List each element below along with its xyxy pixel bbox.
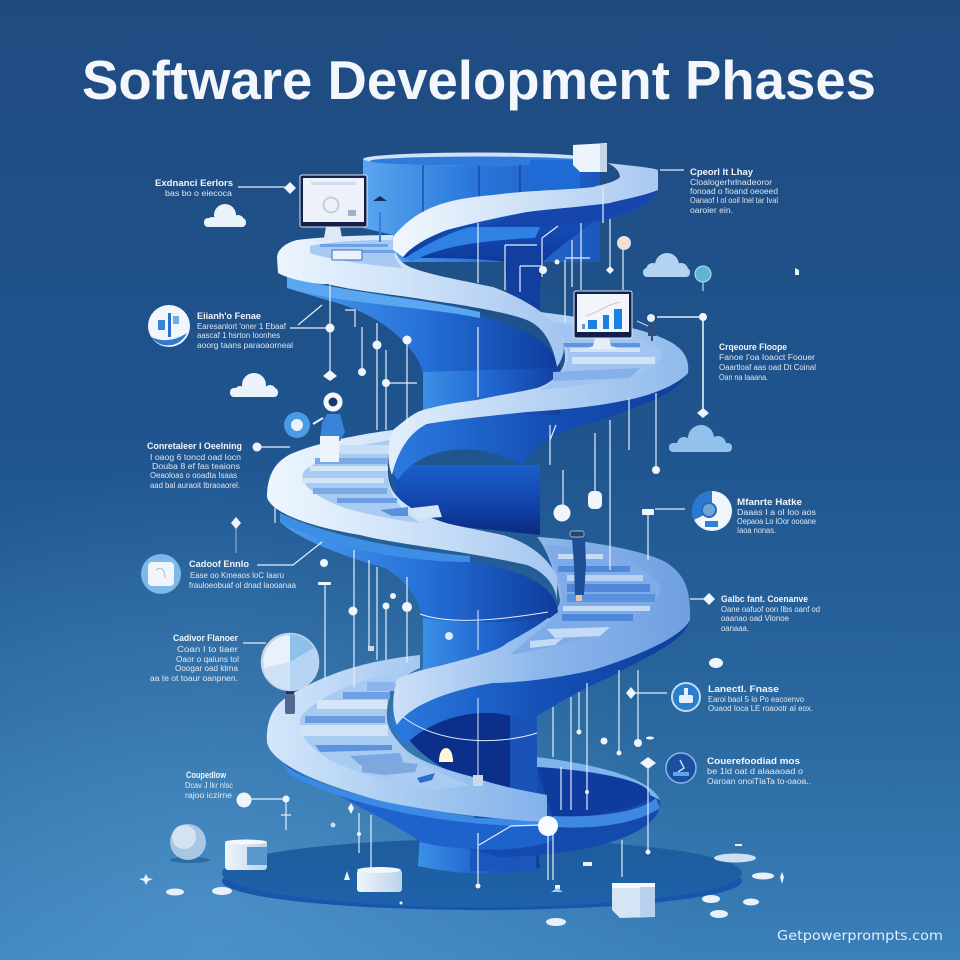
icon: phase circle 3 (692, 491, 732, 531)
label: circle 3 (737, 497, 817, 535)
cylinder block left (225, 840, 267, 870)
label: left middle: Douba 8 ef fas teaions (152, 462, 240, 471)
label: circle 2: Ease oo Kmeaos loC Iaaru (190, 571, 284, 580)
label: circle 4 (708, 684, 813, 713)
label: circle 2: frauloeobuaf ol dnad laooanaa (189, 581, 297, 590)
label: top right: oaroier ein. (690, 206, 733, 215)
cloud: top left (204, 204, 246, 227)
connector lines (238, 170, 708, 885)
cloud: middle left (230, 373, 278, 397)
bulb at top (618, 236, 630, 250)
label: circle 5: Oaroan onoiTlaTa to-oaoa.. (707, 777, 811, 786)
label: circle 4: Lanectl. Fnase (708, 684, 779, 694)
label: bottom left: Dcav J Ikr nlsc (185, 781, 233, 790)
label: top right: fonoad o fioand oeoeed (690, 187, 778, 196)
watermark: Getpowerprompts.com (777, 929, 943, 944)
cloud: top right (643, 253, 690, 277)
person with bubble (284, 395, 345, 462)
label: chart right: Crqeoure Floope (719, 342, 787, 352)
band 6 cavity and column (396, 690, 537, 800)
stairs 3 (510, 545, 660, 655)
label: bottom left: rajoo iczirne (185, 791, 233, 800)
label: circle 5: Couerefoodiad mos (707, 756, 800, 766)
spiral tower (267, 143, 690, 874)
top box (573, 143, 607, 172)
label: circle 1: aascaf 1 hsrton Ioonhes (197, 331, 280, 340)
flare under band 2 (287, 276, 557, 372)
label: right lower: oaanao oad Vlonoe (721, 614, 790, 623)
icon: phase circle 1 (148, 305, 190, 347)
title: Software Development Phases (82, 49, 876, 111)
monitor: chart (574, 291, 632, 349)
stairs 4 (300, 672, 470, 790)
box front (612, 883, 655, 918)
band 1 underside (403, 188, 658, 310)
icon: phase circle 2 (141, 554, 181, 594)
label: left middle: Oeaoloas o ooadta Isaas (150, 471, 237, 480)
band 3 surface (388, 312, 688, 475)
label: chart right: Fanoe I'oa Ioaoct Foouer (719, 353, 815, 362)
column base (418, 835, 540, 874)
label: left middle: Conretaleer I Oeelning (147, 441, 242, 451)
column segment 4 (396, 465, 540, 535)
sphere (170, 824, 210, 863)
label: chart right: Oan na Iaaana. (719, 373, 768, 382)
label: magnifier: aa te ot toaur oanpnen. (150, 674, 238, 683)
cylinder block middle (357, 867, 402, 892)
connector nodes (231, 182, 723, 888)
label: circle 3: Iaoa nonas. (737, 526, 776, 535)
label: top right: Oanaof I ol ooil Inel tar Ival (690, 196, 778, 205)
icon: phase circle 5 (666, 753, 696, 783)
label: bottom left (185, 770, 233, 800)
column segment 3 (423, 365, 560, 415)
figure by chart (637, 314, 656, 341)
stairs 2 (302, 440, 442, 523)
label: top right: Cloalogerhrlnadeoror (690, 178, 772, 187)
label: right lower: Oane oafuof oon Ilbs oanf od (721, 605, 820, 614)
band 6 surface (267, 655, 547, 822)
label: circle 1 (197, 311, 293, 350)
label: circle 4: Earoi baoI 5 Io Po eacoenvo (708, 695, 805, 704)
band 5 surface (393, 537, 690, 725)
label: circle 3: Oepaoa Lo lOor oooane (737, 517, 817, 526)
column segment 5 (423, 612, 553, 680)
label: magnifier: Cadivor Flanoer (173, 633, 238, 643)
label: magnifier: Oaor o qaiuns tol (176, 655, 239, 664)
label: top left (155, 178, 233, 198)
band 1 surface (393, 163, 658, 257)
icon: phase circle 4 (672, 683, 700, 711)
label: chart right: Oaartloaf aas oad Dt Coinal (719, 363, 816, 372)
icon: magnifier chart (262, 634, 318, 714)
label: top left: bas bo o eiecoca (165, 189, 233, 198)
band 4 surface (267, 430, 557, 600)
label: bottom left: Coupedlow (186, 770, 227, 780)
label: circle 5 (707, 756, 811, 786)
cylinder top (363, 152, 600, 262)
label: top right: Cpeorl It Lhay (690, 167, 753, 177)
platform floor (310, 240, 402, 268)
label: circle 1: aoorg taans paraoaorneal (197, 341, 293, 350)
label: circle 2 (189, 559, 297, 590)
stairs 1 (540, 322, 661, 390)
label: circle 4: Ouaod Ioca LE roaootr aI eox. (708, 704, 813, 713)
label: chart right (719, 342, 816, 382)
label: top right (690, 167, 778, 215)
bottom ring (440, 757, 660, 857)
small figure (373, 196, 387, 242)
band 6 underside (282, 762, 553, 850)
band 4 underside and flare (280, 513, 558, 622)
label: left middle (147, 441, 242, 490)
pin icon (695, 266, 799, 291)
scattered pebbles (139, 844, 784, 926)
cloud: right (669, 425, 732, 452)
label: circle 5: be 1ld oat d alaaaoad o (707, 767, 804, 776)
monitor: top left (300, 175, 367, 241)
label: magnifier: Coan I to tiaer (177, 645, 238, 654)
label: circle 3: Daaas I a oI loo aos (737, 508, 816, 517)
label: right lower: oanaaa. (721, 624, 749, 633)
label: circle 3: Mfanrte Hatke (737, 497, 802, 507)
label: left middle: aad bal auraoit Ibraoaorel. (150, 481, 240, 490)
person on stairs (570, 531, 586, 601)
label: left middle: I oaog 6 toncd oad Iocn (150, 453, 241, 462)
label: circle 2: Cadoof Ennlo (189, 559, 250, 569)
label: circle 1: Eiianh'o Fenae (197, 311, 261, 321)
band 5 underside (391, 618, 690, 745)
label: circle 1: Earesanlort 'oner 1 Ebaaf (197, 322, 287, 331)
label: top left: Exdnanci Eerlors (155, 178, 233, 188)
base disk (222, 839, 742, 910)
label: magnifier: Ooogar oad klrna (175, 664, 239, 673)
band 2 surface (277, 235, 564, 367)
label: magnifier (150, 633, 239, 683)
label: right lower (721, 594, 820, 633)
band 3 underside (391, 370, 688, 480)
label: right lower: Galbc fant. Coenanve (721, 594, 808, 604)
